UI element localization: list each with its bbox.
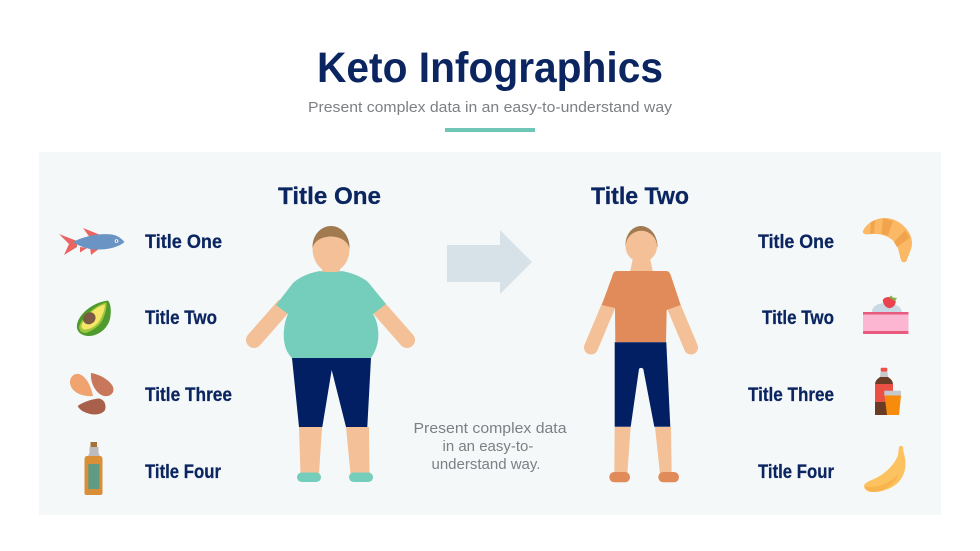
neck [322,262,340,274]
heading: title two: Title Two [591,183,689,210]
label: right title three: Title Three [748,385,834,406]
icon: oil bottle [84,442,102,495]
arms [591,307,691,348]
shorts [292,358,371,427]
panel: comparison [39,152,941,515]
icon: fish [59,228,124,255]
text block: description: in an easy-to- [442,438,533,455]
hair [312,226,350,249]
hair [625,226,658,247]
icon: avocado [77,300,111,336]
label: left title one: Title One [145,232,222,253]
heading: title one: Title One [278,183,381,210]
subtitle: Present complex data in an easy-to-understand way [308,99,673,116]
figure: overweight person [254,226,407,482]
icon: banana [864,446,906,492]
shorts [615,342,670,427]
shoes [609,472,679,482]
icon: cake [863,296,908,334]
neck [630,258,653,272]
legs [299,427,370,474]
icon: soda and juice [875,368,901,415]
label: left title three: Title Three [145,385,232,406]
shoes [297,472,373,482]
face [312,236,350,272]
legs [614,427,672,474]
arrow [447,230,532,294]
text block: description: Present complex data [414,420,567,437]
title: Keto Infographics [317,44,663,92]
label: left title four: Title Four [145,462,222,483]
shirt [276,271,386,358]
arms [254,307,407,340]
label: right title four: Title Four [758,462,835,483]
shirt [602,271,681,342]
title accent bar [445,128,535,132]
figure: slim person [591,226,691,482]
label: right title two: Title Two [762,308,834,329]
face [626,231,657,262]
icon: croissant [863,218,912,262]
icon: almonds [70,373,113,414]
text block: description: understand way. [432,456,540,473]
label: right title one: Title One [758,232,834,253]
label: left title two: Title Two [145,308,217,329]
